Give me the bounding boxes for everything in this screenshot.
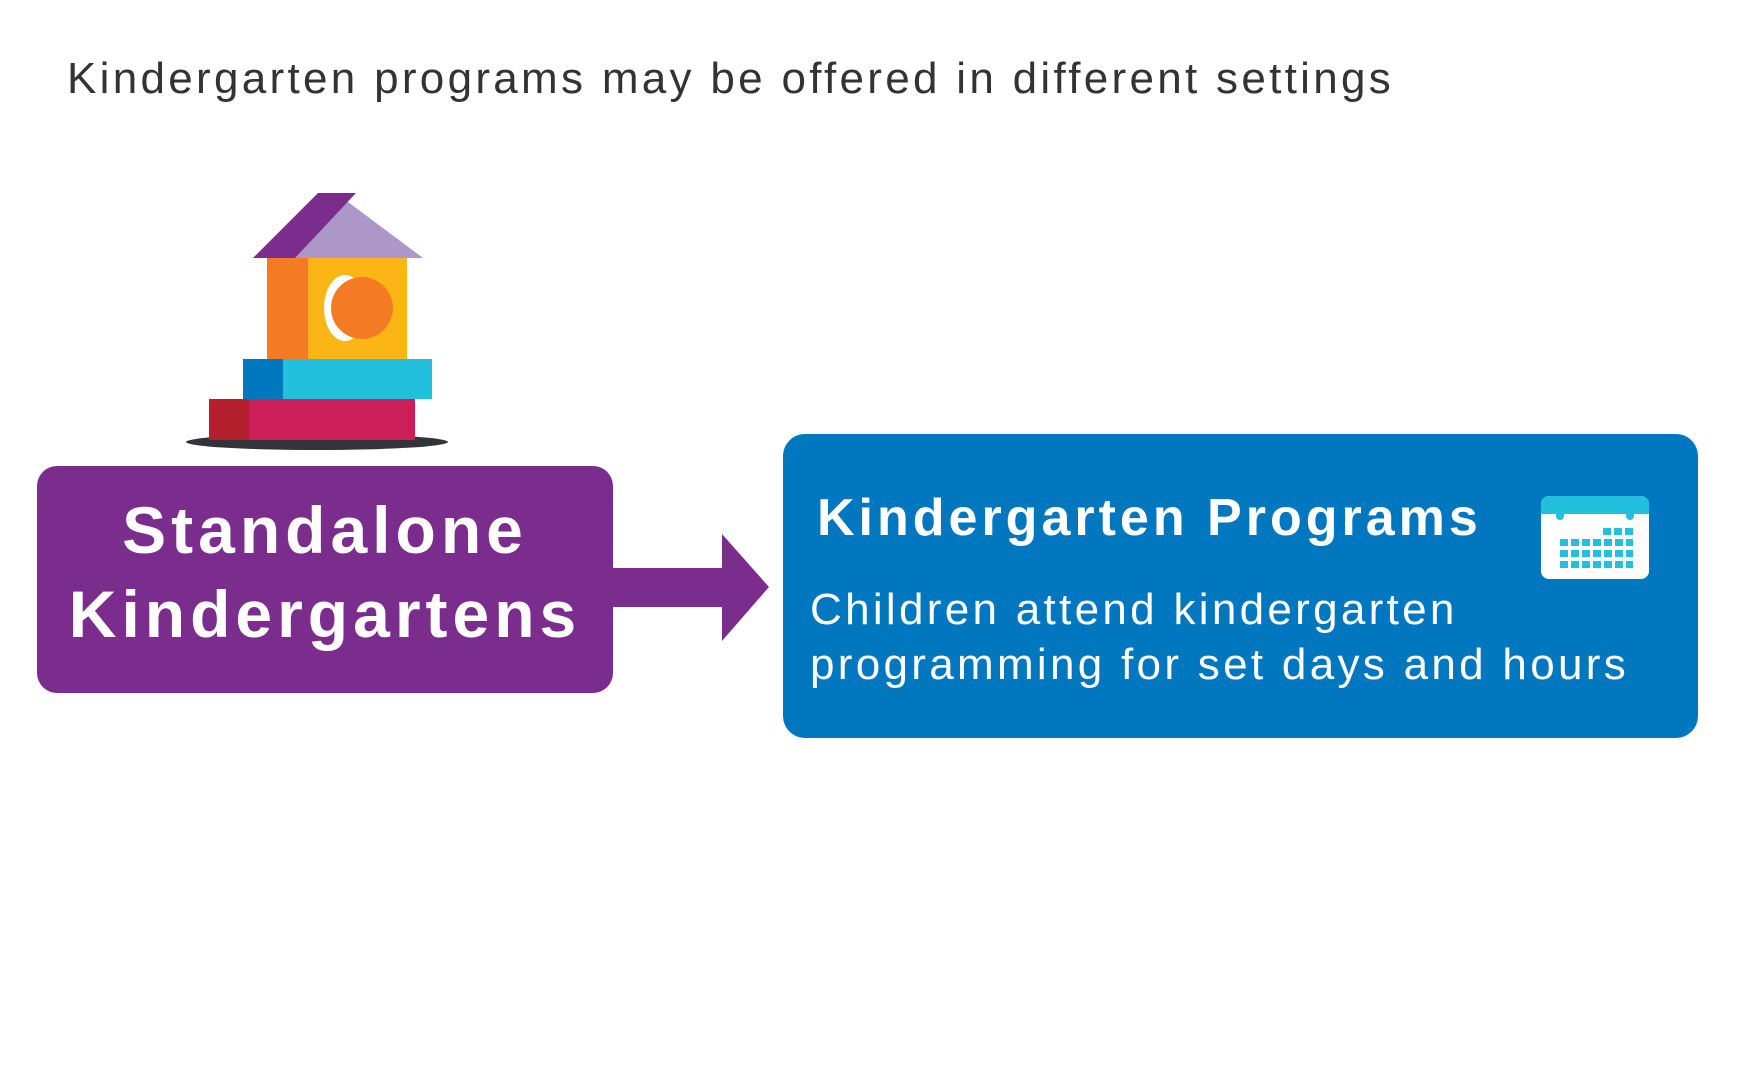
arrow xyxy=(613,534,769,641)
panel: standalone kindergartens: Standalone xyxy=(122,493,528,567)
panel: standalone kindergartens: Kindergartens xyxy=(69,577,581,651)
panel: kindergarten programs xyxy=(783,434,1698,738)
heading: Kindergarten Programs xyxy=(817,489,1482,547)
body text: Children attend kindergarten xyxy=(810,585,1458,634)
body text: programming for set days and hours xyxy=(810,640,1629,689)
icon: block tower xyxy=(186,193,448,450)
panel: standalone kindergartens xyxy=(37,466,613,693)
title: Kindergarten programs may be offered in different settings xyxy=(67,54,1394,103)
body text xyxy=(810,585,1629,689)
icon: calendar xyxy=(1541,496,1649,579)
